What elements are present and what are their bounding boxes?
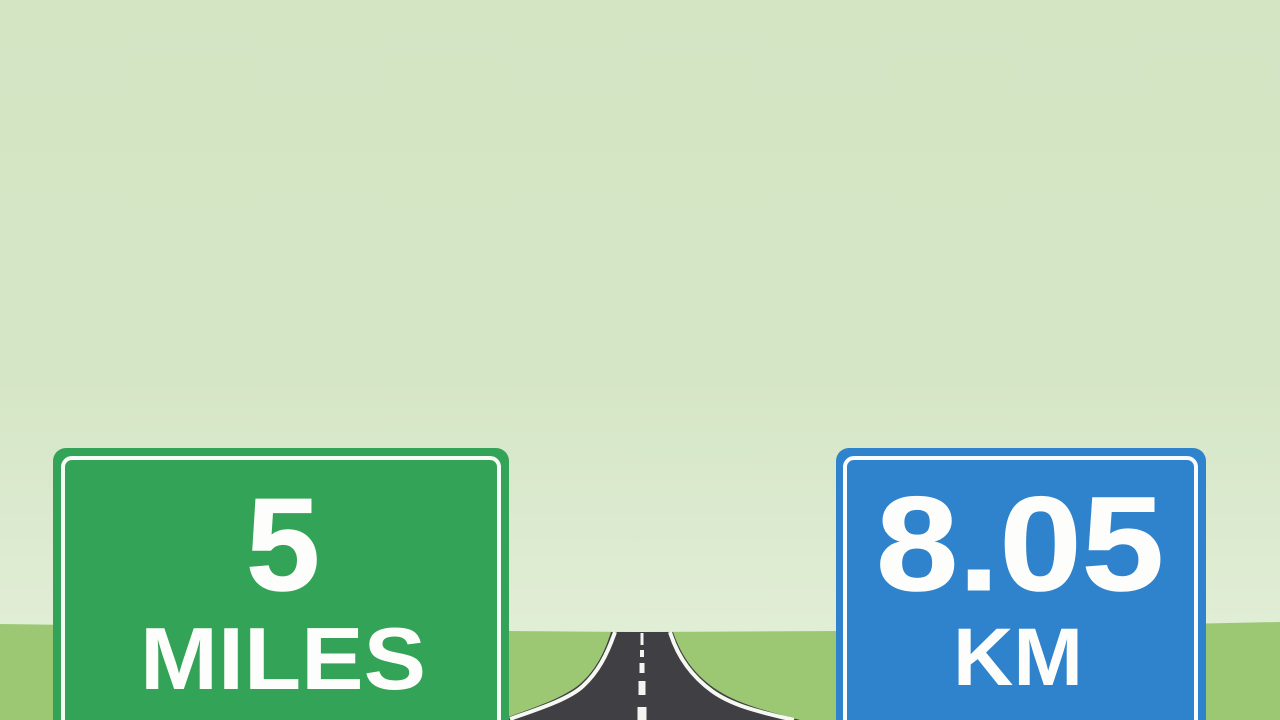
green sign white border [63,458,499,720]
green sign panel [53,448,509,720]
sign unit: km: KM [953,612,1083,703]
blue sign: 8.05 km [836,448,1206,720]
background: grass [0,622,1280,720]
sign value: 5: 5 [246,471,320,618]
sign value: 8.05: 8.05 [876,470,1164,619]
green sign: 5 miles [53,448,509,720]
blue sign white border [845,458,1196,720]
road [500,632,800,720]
road right edge line [670,632,794,720]
sign unit: miles: MILES [140,609,426,708]
road surface [500,632,800,720]
road centre dashes [638,633,646,720]
road left edge line [510,632,615,719]
blue sign panel [836,448,1206,720]
